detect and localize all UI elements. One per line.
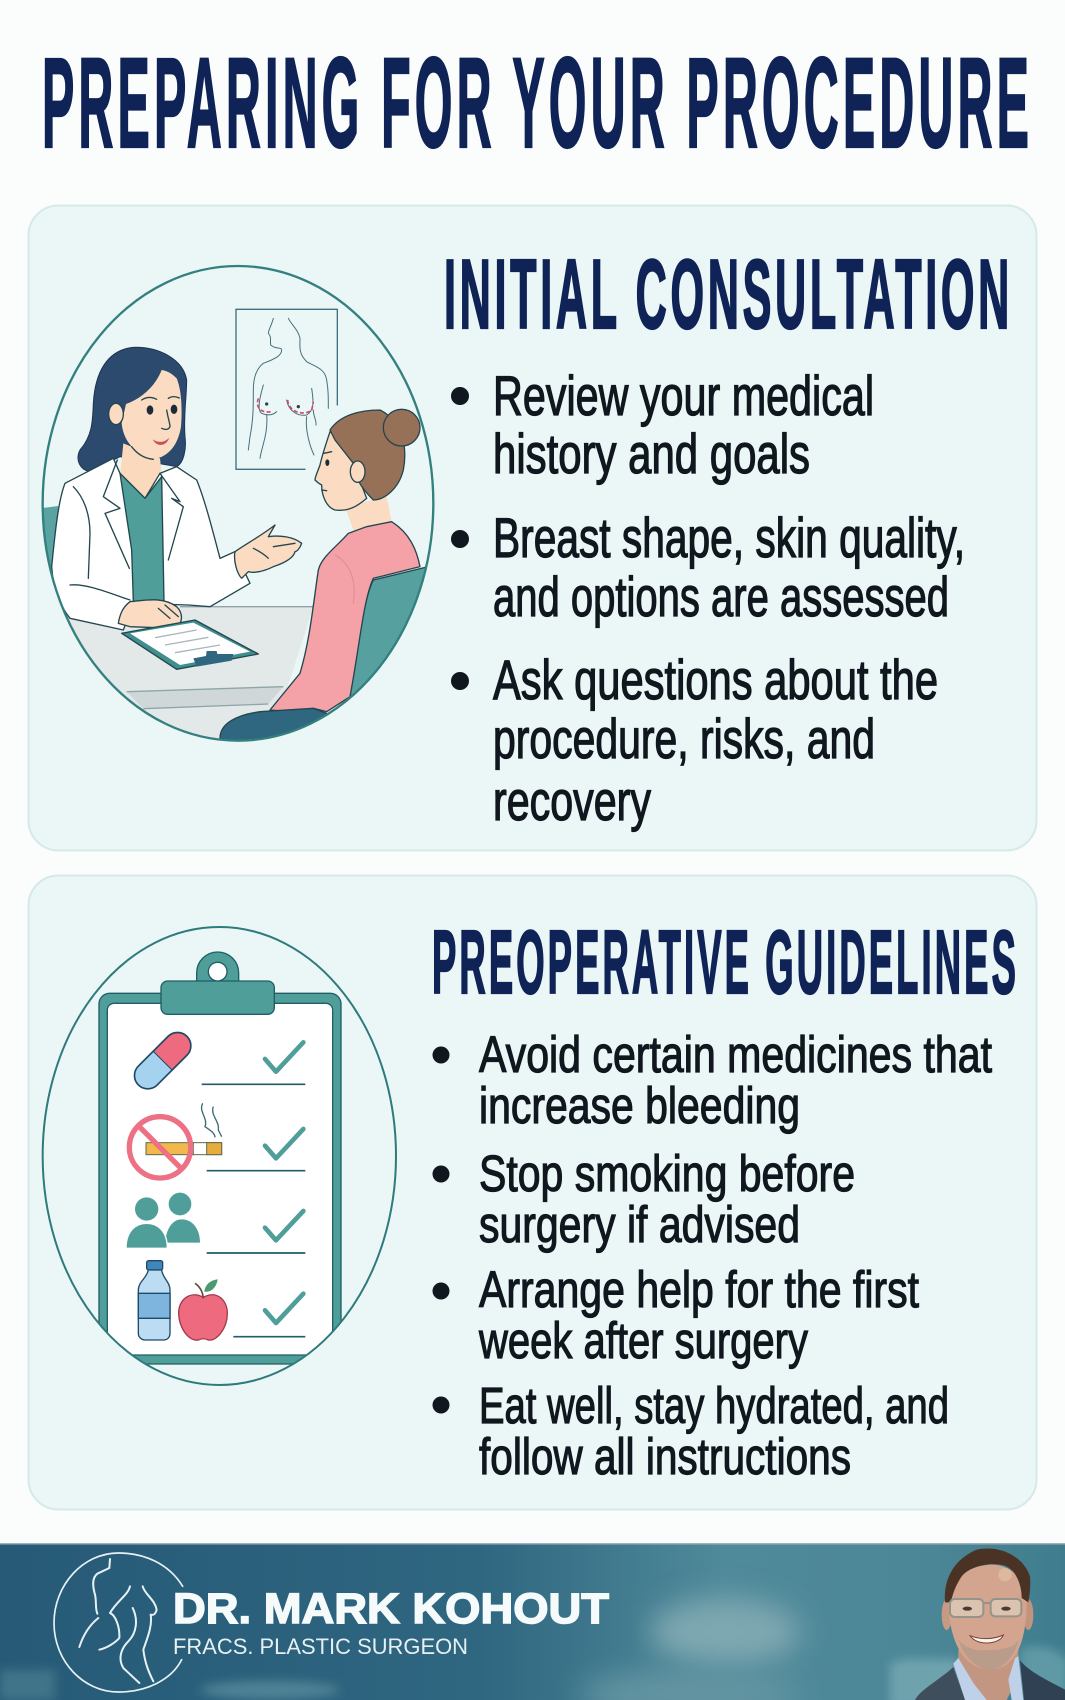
clipboard on desk [122, 620, 258, 669]
doctor [52, 347, 302, 630]
icon: water bottle [138, 1261, 170, 1340]
footer background [0, 1543, 1065, 1700]
bullet item: arrange help: Arrange help for the first [479, 1261, 919, 1318]
bullet item: stop smoking [432, 1145, 855, 1253]
panel: initial consultation [28, 206, 1036, 850]
icon: apple [179, 1279, 227, 1340]
illustration oval frame [43, 927, 396, 1385]
illustration: checklist clipboard [43, 927, 396, 1385]
patient [220, 409, 430, 747]
bullet list: preoperative guidelines [432, 1026, 992, 1485]
logo: circle with figure [54, 1553, 183, 1692]
bullet item: avoid medicines [432, 1026, 992, 1134]
bullet item: ask questions: recovery [493, 769, 651, 832]
bullet item: eat well [432, 1377, 949, 1485]
bullet item: avoid medicines: increase bleeding [479, 1077, 800, 1134]
bullet item: stop smoking: Stop smoking before [479, 1145, 855, 1202]
bullet item: eat well: follow all instructions [479, 1428, 851, 1485]
bullet item: breast assessment [451, 506, 965, 628]
icon: no smoking [129, 1103, 222, 1178]
bullet item: ask questions: procedure, risks, and [493, 707, 875, 770]
bullet item: review history: history and goals [493, 422, 810, 485]
bullet list: initial consultation [451, 364, 965, 832]
bullet item: arrange help [432, 1261, 919, 1369]
illustration oval frame [43, 266, 433, 741]
footer banner [0, 1543, 1065, 1700]
surgeon portrait [890, 1549, 1065, 1700]
bullet item: review history [451, 364, 874, 485]
panel background [28, 876, 1036, 1510]
icon: pill [134, 1032, 192, 1090]
panel background [28, 206, 1036, 850]
icon: two people [126, 1193, 200, 1248]
panel: preoperative guidelines [28, 876, 1036, 1510]
left chair [44, 506, 58, 568]
bullet item: stop smoking: surgery if advised [479, 1196, 800, 1253]
bullet item: ask questions [451, 648, 938, 832]
doctor credentials: FRACS. PLASTIC SURGEON [173, 1634, 468, 1659]
checklist ticks and rules [202, 1042, 305, 1337]
doctor name: DR. MARK KOHOUT [173, 1585, 609, 1633]
bullet item: review history: Review your medical [493, 364, 874, 427]
bullet item: arrange help: week after surgery [478, 1312, 808, 1369]
desk [63, 607, 313, 747]
clipboard clip [161, 952, 274, 1014]
clipboard board [99, 993, 341, 1364]
illustration: doctor consulting patient [40, 266, 433, 747]
wall poster [236, 309, 337, 469]
